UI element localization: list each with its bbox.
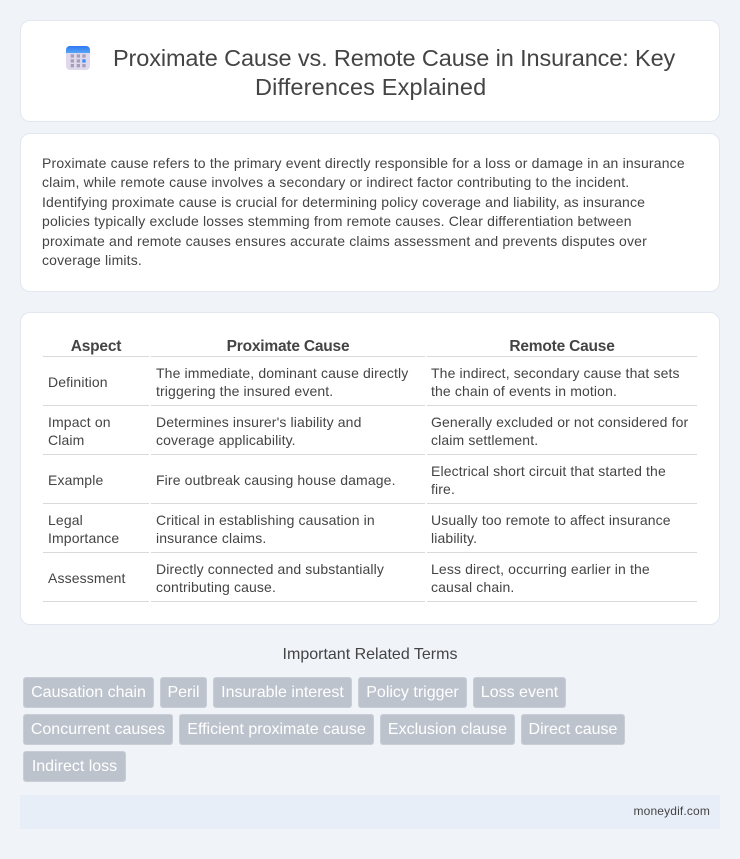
text block: summary paragraph: Proximate cause refers to the primary event directly responsible for a loss or damage in an insurance (42, 155, 685, 171)
row: impact on claim: claim settlement. (431, 432, 538, 448)
row: assessment: causal chain. (431, 579, 514, 595)
footer: source: moneydif.com (634, 804, 710, 818)
title: Differences Explained (255, 74, 486, 100)
tags: related terms: Exclusion clause (388, 721, 507, 738)
row: impact on claim: Impact on (48, 414, 111, 430)
text block: summary paragraph: proximate and remote causes ensures accurate claims assessment and prevents disputes over (42, 233, 647, 249)
row: impact on claim: Generally excluded or not considered for (431, 414, 688, 430)
row: assessment: contributing cause. (156, 579, 276, 595)
row: definition: the chain of events in motion. (431, 383, 617, 399)
row: legal importance: Importance (48, 530, 119, 546)
row: legal importance: Usually too remote to affect insurance (431, 512, 671, 528)
text block: summary paragraph: coverage limits. (42, 252, 142, 268)
row: legal importance: Critical in establishing causation in (156, 512, 375, 528)
row: definition: The indirect, secondary cause that sets (431, 365, 680, 381)
tags: related terms: Insurable interest (221, 684, 344, 701)
table header: proximate cause: Proximate Cause (227, 338, 349, 355)
table header: aspect: Aspect (71, 338, 121, 355)
row: example: Electrical short circuit that started the (431, 463, 666, 479)
row: definition: triggering the insured event. (156, 383, 333, 399)
row: legal importance: liability. (431, 530, 477, 546)
title: Proximate Cause vs. Remote Cause in Insurance: Key (113, 45, 675, 71)
tags: related terms: Policy trigger (366, 684, 459, 701)
row: assessment: Directly connected and substantially (156, 561, 384, 577)
tags: related terms: Indirect loss (32, 758, 117, 775)
tags: related terms (23, 677, 625, 782)
text block: summary paragraph (42, 155, 685, 268)
row: impact on claim: coverage applicability. (156, 432, 296, 448)
title (113, 45, 676, 100)
row: definition: The immediate, dominant cause directly (156, 365, 408, 381)
row: example (48, 463, 666, 497)
tags: related terms: Causation chain (31, 684, 146, 701)
tags: related terms: Efficient proximate cause (187, 721, 366, 738)
tags: related terms: Concurrent causes (31, 721, 165, 738)
panel: comparison table (20, 312, 720, 625)
row: legal importance (48, 512, 671, 546)
row: assessment (48, 561, 650, 595)
table header: remote cause: Remote Cause (509, 338, 615, 355)
text block: summary paragraph: policies typically exclude losses stemming from remote causes. Clear differentiation between (42, 213, 632, 229)
text block: summary paragraph: Identifying proximate cause is crucial for determining policy coverage and liability, as insurance (42, 194, 645, 210)
row: impact on claim: Determines insurer's liability and (156, 414, 362, 430)
tags: related terms: Peril (167, 684, 200, 701)
panel: header (20, 20, 720, 122)
row: legal importance: Legal (48, 512, 83, 528)
tags: related terms: Loss event (481, 684, 558, 701)
icon: calendar (66, 46, 90, 70)
footer bar (20, 795, 720, 829)
row: legal importance: insurance claims. (156, 530, 266, 546)
text block: summary paragraph: claim, while remote cause involves a secondary or indirect factor contributing to the incident. (42, 174, 629, 190)
row: assessment: Less direct, occurring earlier in the (431, 561, 650, 577)
panel: summary (20, 133, 720, 292)
row: impact on claim (48, 414, 688, 448)
row: example: Fire outbreak causing house damage. (156, 472, 396, 488)
row: impact on claim: Claim (48, 432, 84, 448)
row: definition (48, 365, 680, 399)
row: example: Example (48, 472, 103, 488)
heading: important related terms: Important Related Terms (283, 646, 457, 663)
tags: related terms: Direct cause (529, 721, 617, 738)
row: assessment: Assessment (48, 570, 126, 586)
row: example: fire. (431, 481, 455, 497)
row: definition: Definition (48, 374, 108, 390)
